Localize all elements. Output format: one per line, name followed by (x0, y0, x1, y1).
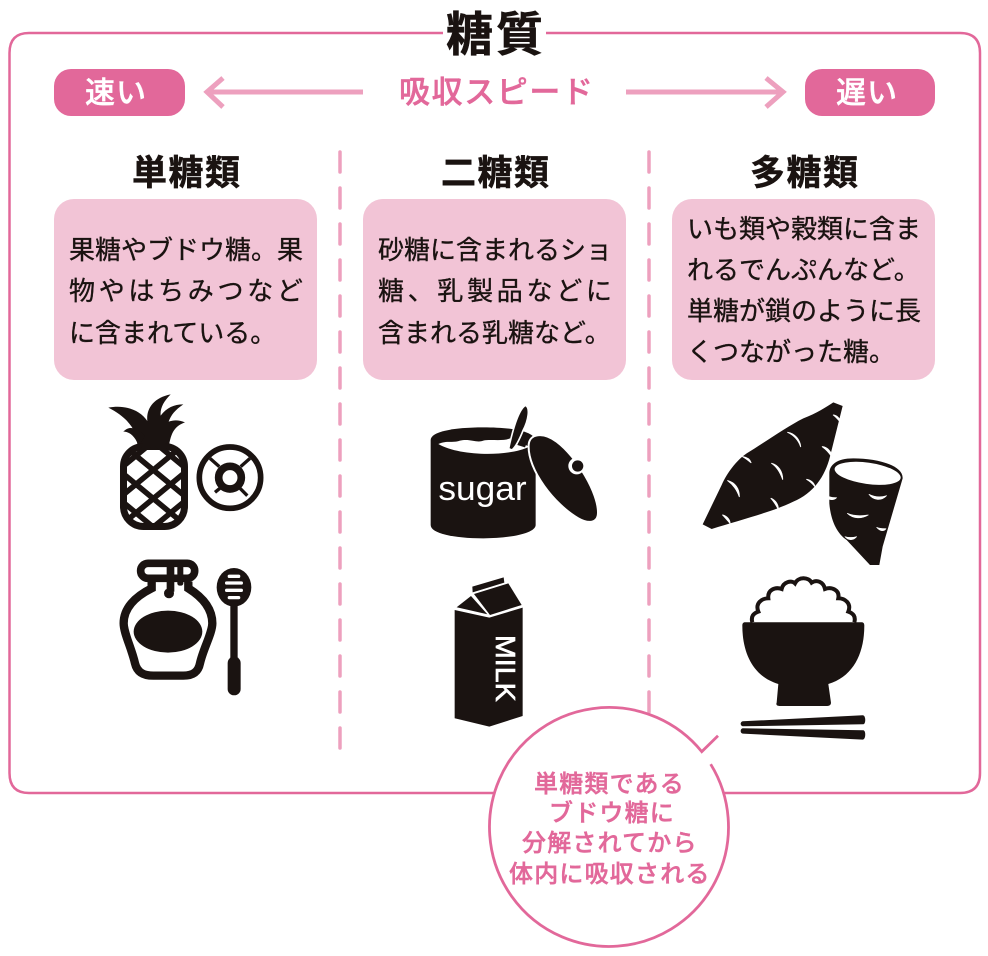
icon: cut sweet potato (829, 458, 903, 565)
icon: sugar pot: sugar (438, 470, 527, 508)
icon: pineapple (108, 394, 188, 530)
arrow: right (626, 78, 783, 107)
icon: milk carton (455, 577, 523, 727)
icon: chopsticks (741, 715, 865, 740)
icon: syrup bottle (124, 563, 212, 676)
panel: disaccharides (363, 154, 626, 727)
callout: 分解されてから (522, 830, 698, 857)
icon: sugar pot (431, 405, 598, 538)
panel: monosaccharides (54, 154, 317, 695)
icon: rice bowl (742, 578, 864, 706)
description: monosaccharides: に含まれている。 (69, 318, 276, 348)
icon: milk carton: MILK (490, 635, 521, 702)
description: monosaccharides: 果糖やブドウ糖。果 (69, 235, 303, 265)
heading: polysaccharides: 多糖類 (750, 154, 860, 193)
callout: 体内に吸収される (509, 861, 711, 888)
description: disaccharides (363, 199, 626, 380)
heading: monosaccharides: 単糖類 (132, 154, 242, 193)
title: 糖質 (446, 8, 546, 61)
description: disaccharides: 砂糖に含まれるショ (378, 235, 612, 265)
description: polysaccharides: くつながった糖。 (687, 337, 895, 367)
description: monosaccharides (54, 199, 317, 380)
icon: honey dipper (217, 568, 251, 695)
speed label: 吸収スピード (399, 75, 595, 110)
panel: polysaccharides (672, 154, 935, 740)
arrow: left (207, 78, 363, 107)
heading: disaccharides: 二糖類 (441, 154, 551, 193)
callout: 単糖類である (534, 771, 685, 798)
description: disaccharides: 糖、乳製品などに (378, 276, 616, 306)
badge: fast (54, 69, 185, 116)
description: polysaccharides (672, 199, 935, 380)
icon: pineapple slice (199, 447, 261, 508)
badge: slow (805, 69, 935, 116)
callout (489, 707, 728, 946)
description: polysaccharides: いも類や穀類に含ま (687, 214, 921, 244)
description: polysaccharides: れるでんぷんなど。 (687, 255, 920, 285)
badge: slow: 遅い (836, 77, 898, 110)
badge: fast: 速い (85, 77, 147, 110)
icon: sweet potato (703, 402, 843, 529)
outer frame (10, 33, 980, 793)
description: disaccharides: 含まれる乳糖など。 (378, 318, 611, 348)
description: monosaccharides: 物やはちみつなど (69, 276, 307, 306)
description: polysaccharides: 単糖が鎖のように長 (687, 296, 921, 326)
callout: ブドウ糖に (549, 799, 675, 827)
